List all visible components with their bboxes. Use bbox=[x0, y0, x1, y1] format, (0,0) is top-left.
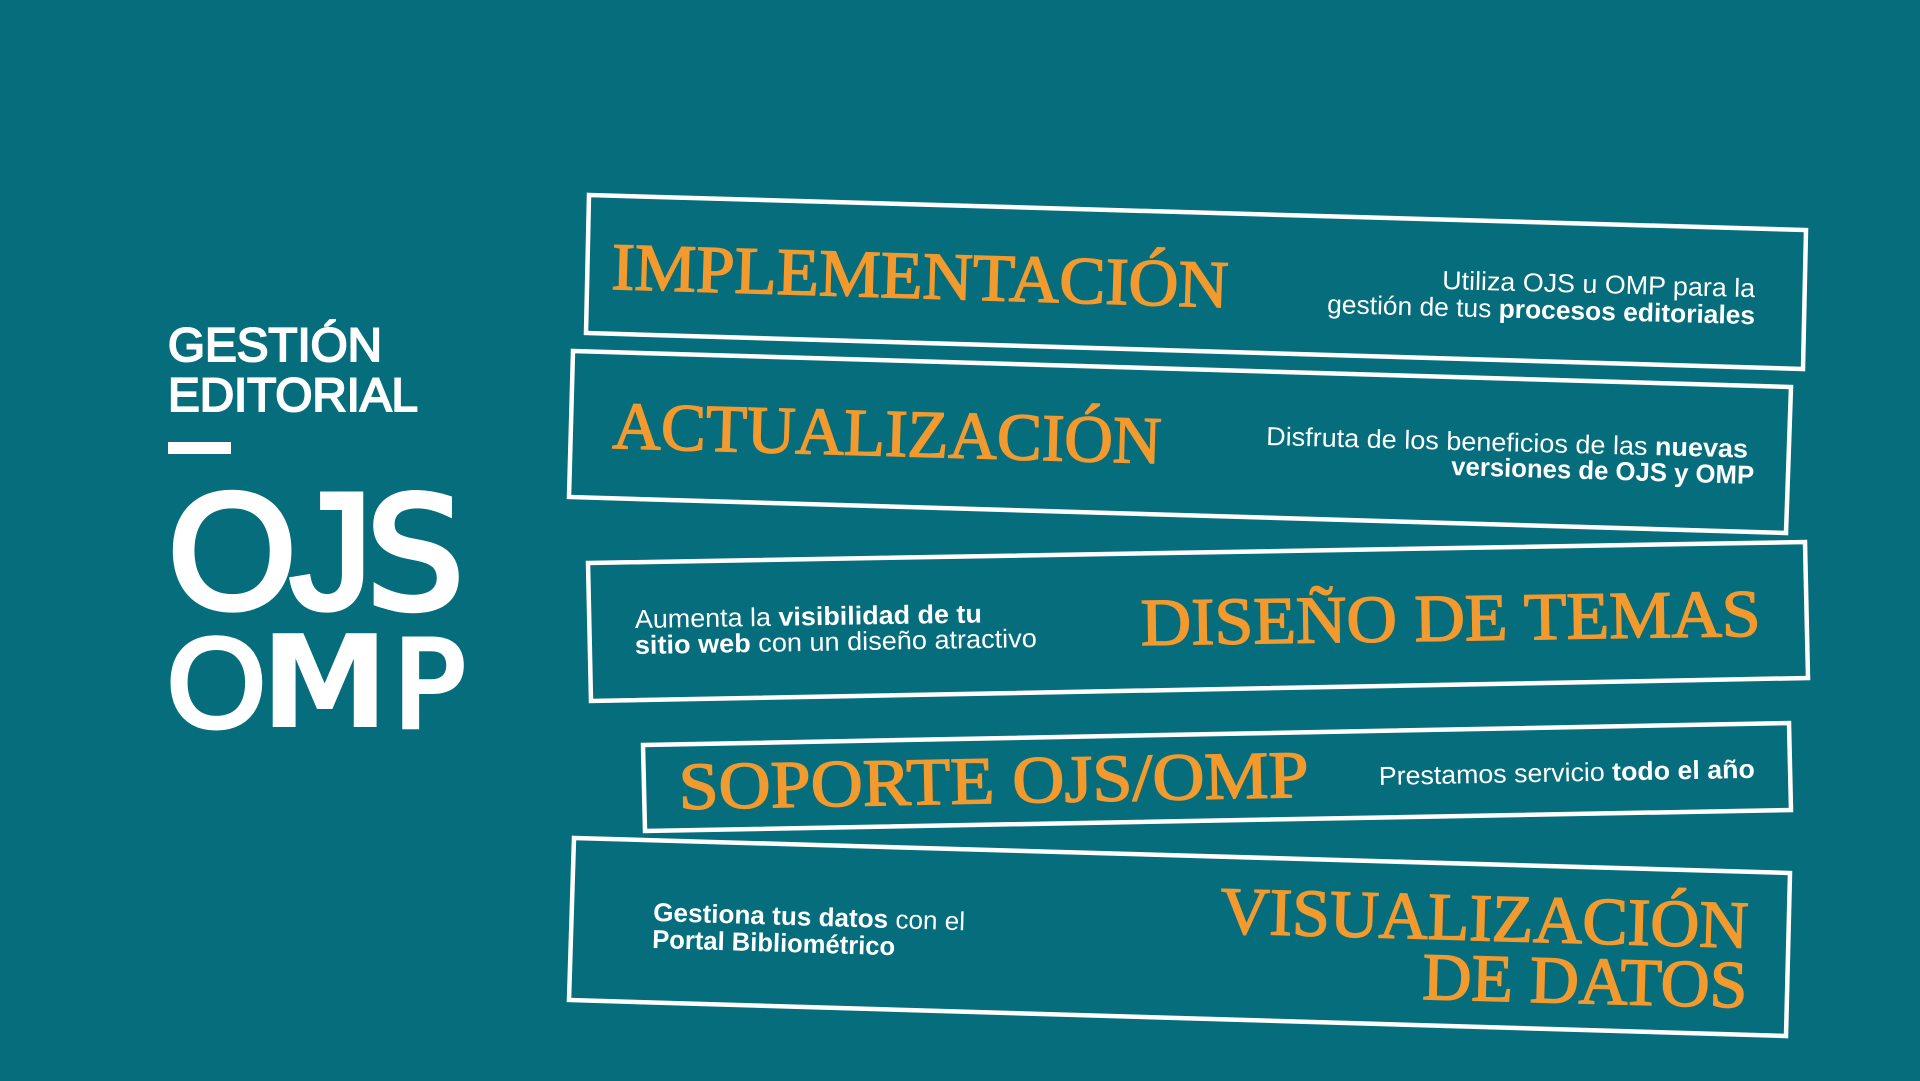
panel heading: VISUALIZACIÓN bbox=[1220, 874, 1749, 963]
heading: OMP: M bbox=[261, 609, 388, 758]
panel description: Disfruta de los beneficios de las nuevas bbox=[1266, 421, 1748, 464]
panel: visualización de datos bbox=[569, 838, 1790, 1036]
panel description bbox=[635, 599, 1037, 660]
heading: OMP: P bbox=[393, 617, 465, 756]
panel: soporte ojs/omp bbox=[643, 723, 1791, 831]
panel description: gestión de tus procesos editoriales bbox=[1327, 289, 1755, 330]
heading: OJS: O bbox=[168, 459, 296, 643]
heading: OMP: O bbox=[167, 612, 266, 754]
panel description: sitio web con un diseño atractivo bbox=[635, 623, 1037, 660]
panel border bbox=[569, 351, 1791, 533]
panel description bbox=[652, 897, 966, 961]
heading: OJS: S bbox=[366, 464, 464, 645]
panel heading bbox=[1220, 874, 1749, 1023]
panel heading: SOPORTE OJS/OMP bbox=[678, 738, 1309, 824]
panel border bbox=[569, 838, 1790, 1036]
panel border bbox=[586, 195, 1806, 369]
panel border bbox=[588, 542, 1808, 701]
panel heading: IMPLEMENTACIÓN bbox=[611, 230, 1229, 322]
panel heading: DISEÑO DE TEMAS bbox=[1140, 577, 1761, 660]
heading: gestión editorial bbox=[168, 318, 418, 421]
panel description: Gestiona tus datos con el bbox=[653, 897, 966, 936]
panel border bbox=[643, 723, 1791, 831]
panel heading: DE DATOS bbox=[1422, 940, 1748, 1023]
panel description bbox=[1266, 421, 1755, 490]
panel description bbox=[1327, 265, 1756, 330]
heading: gestión editorial: EDITORIAL bbox=[168, 368, 418, 421]
panel description: versiones de OJS y OMP bbox=[1451, 451, 1755, 490]
panel description: Utiliza OJS u OMP para la bbox=[1442, 265, 1756, 303]
accent dash bbox=[168, 442, 231, 454]
panel description: Aumenta la visibilidad de tu bbox=[635, 599, 982, 634]
title block bbox=[167, 318, 465, 758]
panel heading: ACTUALIZACIÓN bbox=[612, 389, 1162, 478]
heading: gestión editorial: GESTIÓN bbox=[168, 318, 382, 371]
panel: diseño de temas bbox=[588, 542, 1808, 701]
panel: implementación bbox=[586, 195, 1806, 369]
panel: actualización bbox=[569, 351, 1791, 533]
heading: OJS: J bbox=[290, 459, 372, 643]
panel description: Prestamos servicio todo el año bbox=[1379, 754, 1755, 791]
panel description: Portal Bibliométrico bbox=[652, 924, 896, 961]
